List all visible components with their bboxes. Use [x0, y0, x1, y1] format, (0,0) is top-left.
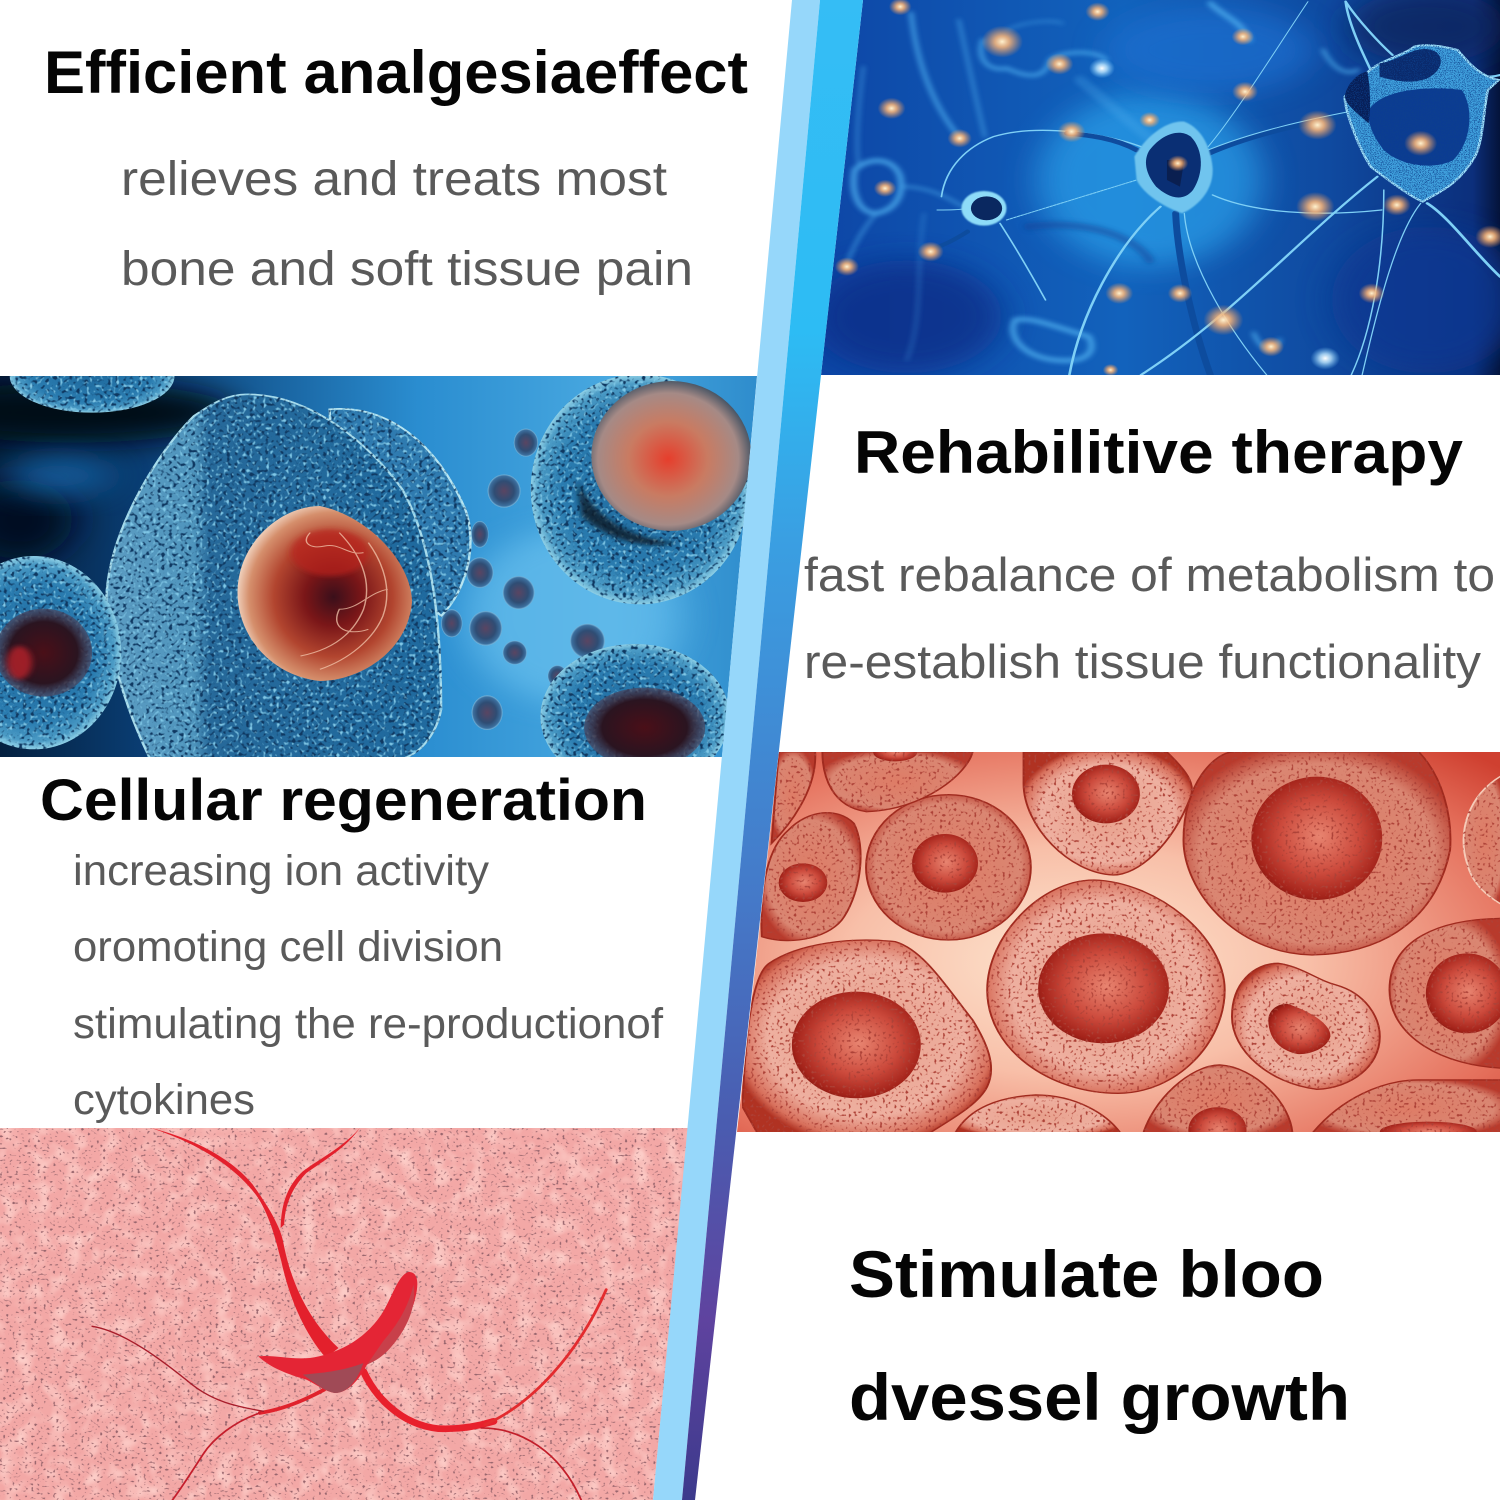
blood vessels — [151, 1128, 360, 1358]
text block: rehabilitive description — [804, 548, 1495, 688]
text block: regeneration description: oromoting cell division — [73, 923, 503, 971]
heading: stimulate blood vessel growth: dvessel growth — [849, 1360, 1350, 1434]
text block: analgesia description — [121, 153, 693, 296]
heading: stimulate blood vessel growth — [849, 1237, 1350, 1434]
small neuron body — [961, 191, 1006, 226]
lower right nucleus — [584, 688, 706, 757]
image panel: red cells — [730, 744, 1500, 1153]
diagonal band: light stripe — [653, 0, 820, 1500]
heading: rehabilitive therapy: Rehabilitive therapy — [854, 419, 1464, 486]
large neuron body — [1345, 45, 1499, 202]
textured cell bodies — [0, 376, 748, 757]
heading: efficient analgesia effect: Efficient analgesiaeffect — [44, 39, 748, 106]
heading: stimulate blood vessel growth: Stimulate bloo — [849, 1237, 1324, 1311]
heading: cellular regeneration: Cellular regeneration — [40, 768, 647, 833]
image panel: cells with nucleus — [0, 376, 757, 757]
small spheres — [441, 429, 605, 730]
central neuron body — [1134, 122, 1213, 213]
central vessel junction — [258, 1272, 417, 1393]
nuclei — [779, 744, 1500, 1153]
text block: regeneration description — [73, 847, 664, 1124]
background neuron network — [846, 3, 1358, 361]
text block: analgesia description: relieves and treats most — [121, 153, 667, 206]
main nucleus — [238, 506, 412, 681]
text block: rehabilitive description: fast rebalance of metabolism to — [804, 548, 1495, 601]
left nucleus — [0, 609, 92, 697]
diagonal band: gradient stripe — [682, 0, 863, 1500]
neuron dendrites — [928, 2, 1500, 375]
text block: regeneration description: cytokines — [73, 1076, 255, 1124]
image panel: pink tissue with blood vessels — [0, 1128, 690, 1500]
glowing spots — [835, 0, 1500, 376]
text block: regeneration description: increasing ion activity — [73, 847, 489, 895]
text block: analgesia description: bone and soft tissue pain — [121, 243, 693, 296]
text block: regeneration description: stimulating the re-productionof — [73, 1000, 664, 1048]
text block: rehabilitive description: re-establish tissue functionality — [804, 635, 1482, 688]
image panel: neurons — [811, 0, 1500, 376]
upper right nucleus — [577, 381, 751, 545]
